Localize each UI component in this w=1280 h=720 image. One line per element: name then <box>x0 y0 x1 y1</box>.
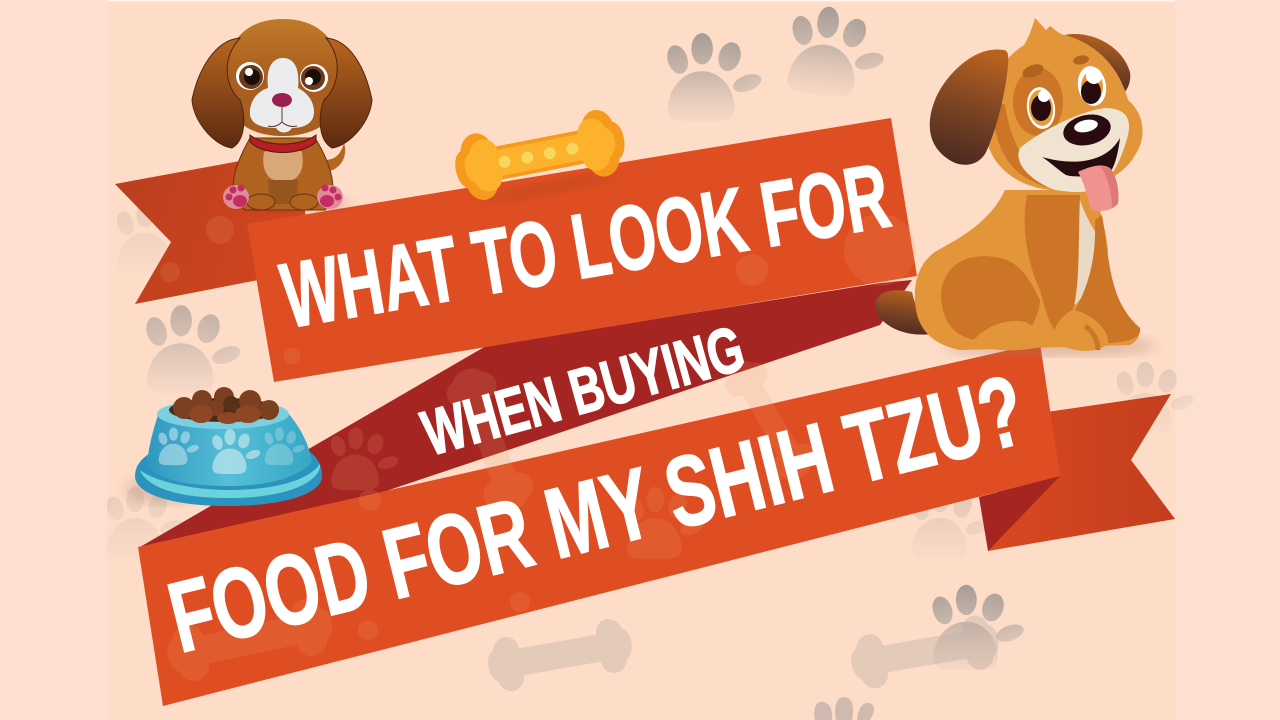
feet <box>247 194 318 210</box>
near ear <box>930 49 1008 165</box>
eyebrows <box>1021 54 1090 80</box>
muzzle <box>250 58 314 132</box>
title line 2: WHEN BUYING <box>415 312 752 469</box>
collar <box>250 135 316 152</box>
watermark bones <box>484 612 1003 694</box>
ribbon: right tail <box>979 394 1175 551</box>
face patch <box>1018 108 1129 192</box>
head <box>985 18 1143 191</box>
hind paw <box>972 321 1042 350</box>
body <box>915 190 1139 350</box>
watermark paws <box>104 3 1195 670</box>
nose <box>272 93 292 107</box>
head <box>224 19 342 136</box>
ribbon: top banner <box>247 118 917 382</box>
bowl paws <box>157 427 306 474</box>
icon: food bowl <box>125 387 322 506</box>
tail <box>875 290 934 335</box>
icon: brown puppy <box>192 19 372 211</box>
icon: orange bone <box>450 106 632 212</box>
icon: orange puppy <box>875 18 1155 356</box>
tail <box>325 143 345 172</box>
ears <box>192 38 244 148</box>
kibble <box>173 387 279 424</box>
body <box>233 138 333 210</box>
chest <box>1045 200 1101 305</box>
eyes <box>236 62 264 90</box>
front leg <box>1025 195 1080 332</box>
mouth <box>1042 138 1120 176</box>
ribbon: bottom banner <box>138 343 1060 706</box>
faint banner decorations <box>160 214 916 686</box>
title line 1: WHAT TO LOOK FOR <box>274 145 897 348</box>
watermark paw: cropped at bottom edge <box>814 697 874 720</box>
eyes <box>1024 85 1058 131</box>
nose <box>1060 110 1114 150</box>
far ear <box>1065 34 1130 95</box>
ribbon: dark middle band <box>140 280 912 560</box>
ribbon: left tail <box>115 150 310 304</box>
tongue <box>1078 166 1118 211</box>
bowl body <box>147 413 312 486</box>
bowl base <box>135 446 322 506</box>
paw front <box>1054 310 1108 351</box>
haunch <box>941 256 1040 340</box>
